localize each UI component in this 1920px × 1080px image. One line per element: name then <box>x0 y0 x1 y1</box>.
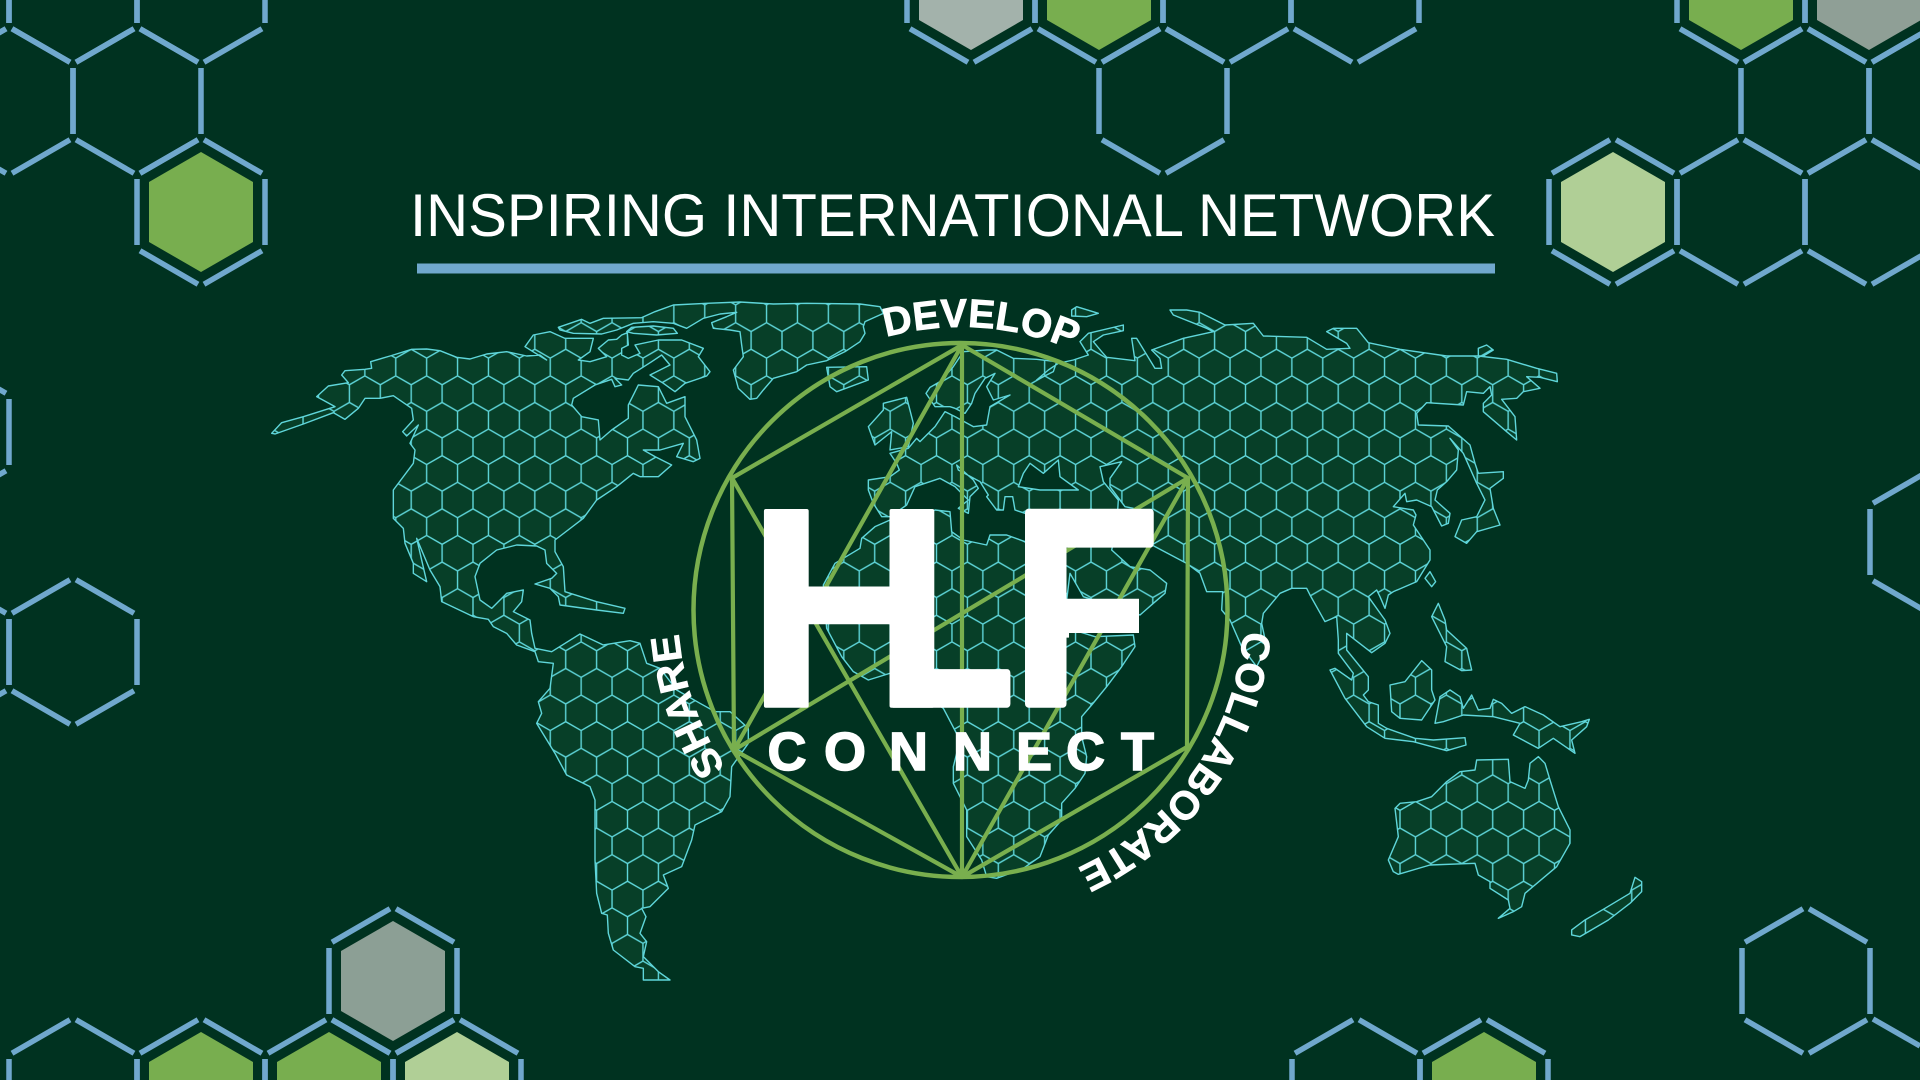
logo subtitle: CONNECT: CONNECT <box>768 722 1154 782</box>
hexagon: left edge lower <box>0 580 137 724</box>
title: INSPIRING INTERNATIONAL NETWORK <box>410 182 1495 249</box>
logo wordmark: HLF <box>764 508 1154 708</box>
logo wordmark: HLF: L <box>878 455 1014 762</box>
world map with hexagon texture <box>260 290 1660 990</box>
hexagon cluster: top right <box>1549 0 1920 284</box>
green circle and hexagon geometry <box>694 343 1228 877</box>
title underline <box>417 264 1495 274</box>
hexagon cluster: bottom right <box>1742 909 1920 1053</box>
hexagon cluster: bottom centre <box>1292 1020 1548 1080</box>
hexagon cluster: bottom left <box>9 909 521 1080</box>
logo wordmark: HLF: F <box>1012 452 1159 763</box>
hexagon cluster: top centre <box>907 0 1419 173</box>
curved label: DEVELOP: DEVELOP <box>882 298 1080 344</box>
hexagon: right edge <box>1870 470 1920 614</box>
curved label: SHARE: SHARE <box>650 634 722 778</box>
curved label: COLLABORATE: COLLABORATE <box>1078 634 1270 892</box>
hexagon: left edge upper <box>0 360 9 504</box>
logo wordmark: HLF: H <box>747 450 951 766</box>
hexagon cluster: top left <box>0 0 265 284</box>
